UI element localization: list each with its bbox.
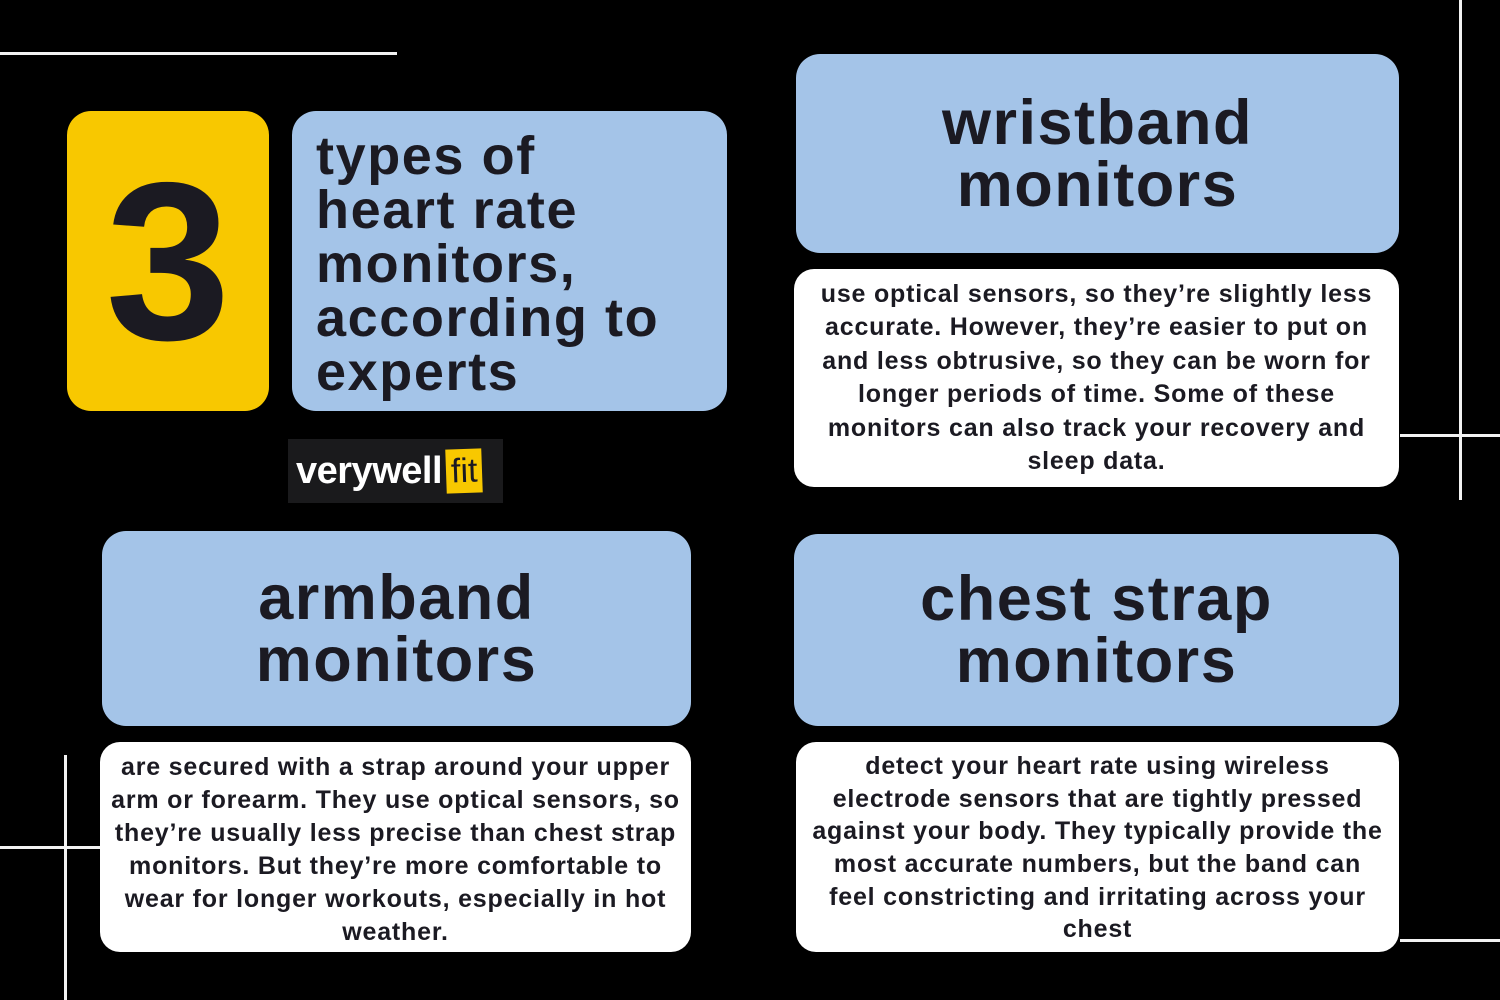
logo: verywell fit: fit	[450, 452, 478, 490]
chest strap description: detect your heart rate using wireless	[865, 752, 1330, 780]
chest strap description: chest	[1063, 915, 1132, 943]
chest strap heading: chest strap	[920, 564, 1273, 634]
armband heading	[102, 531, 691, 726]
chest strap description: most accurate numbers, but the band can	[834, 850, 1361, 878]
title: types of	[316, 126, 536, 186]
wristband description	[794, 269, 1399, 487]
armband description: they’re usually less precise than chest strap	[115, 819, 676, 847]
armband heading: armband	[258, 562, 535, 632]
armband description: are secured with a strap around your upper	[121, 753, 670, 781]
wristband description: and less obtrusive, so they can be worn for	[822, 346, 1371, 374]
wristband description: longer periods of time. Some of these	[858, 380, 1335, 408]
number badge: 3	[67, 111, 269, 411]
wristband description: accurate. However, they’re easier to put on	[825, 313, 1368, 341]
armband description: monitors. But they’re more comfortable to	[129, 852, 662, 880]
chest strap heading	[794, 534, 1399, 726]
title: experts	[316, 342, 519, 402]
chest strap description	[796, 742, 1399, 952]
logo: verywell fit	[288, 439, 503, 503]
armband description	[100, 742, 691, 952]
chest strap heading: monitors	[956, 626, 1237, 696]
chest strap description: feel constricting and irritating across your	[829, 883, 1366, 911]
wristband description: use optical sensors, so they’re slightly less	[821, 280, 1372, 308]
armband heading: monitors	[256, 624, 537, 694]
wristband heading	[796, 54, 1399, 253]
title: monitors,	[316, 234, 576, 294]
title: according to	[316, 288, 659, 348]
armband description: arm or forearm. They use optical sensors, so	[111, 786, 680, 814]
chest strap description: against your body. They typically provide the	[812, 817, 1383, 845]
armband description: weather.	[342, 918, 449, 946]
title: heart rate	[316, 180, 578, 240]
number badge: 3: 3	[105, 134, 231, 386]
wristband heading: wristband	[942, 88, 1253, 158]
chest strap description: electrode sensors that are tightly pressed	[833, 785, 1362, 813]
wristband description: monitors can also track your recovery and	[828, 414, 1365, 442]
wristband heading: monitors	[957, 150, 1238, 220]
armband description: wear for longer workouts, especially in hot	[125, 885, 666, 913]
title	[292, 111, 727, 411]
wristband description: sleep data.	[1027, 447, 1166, 475]
logo: verywell fit: verywell	[296, 450, 442, 492]
